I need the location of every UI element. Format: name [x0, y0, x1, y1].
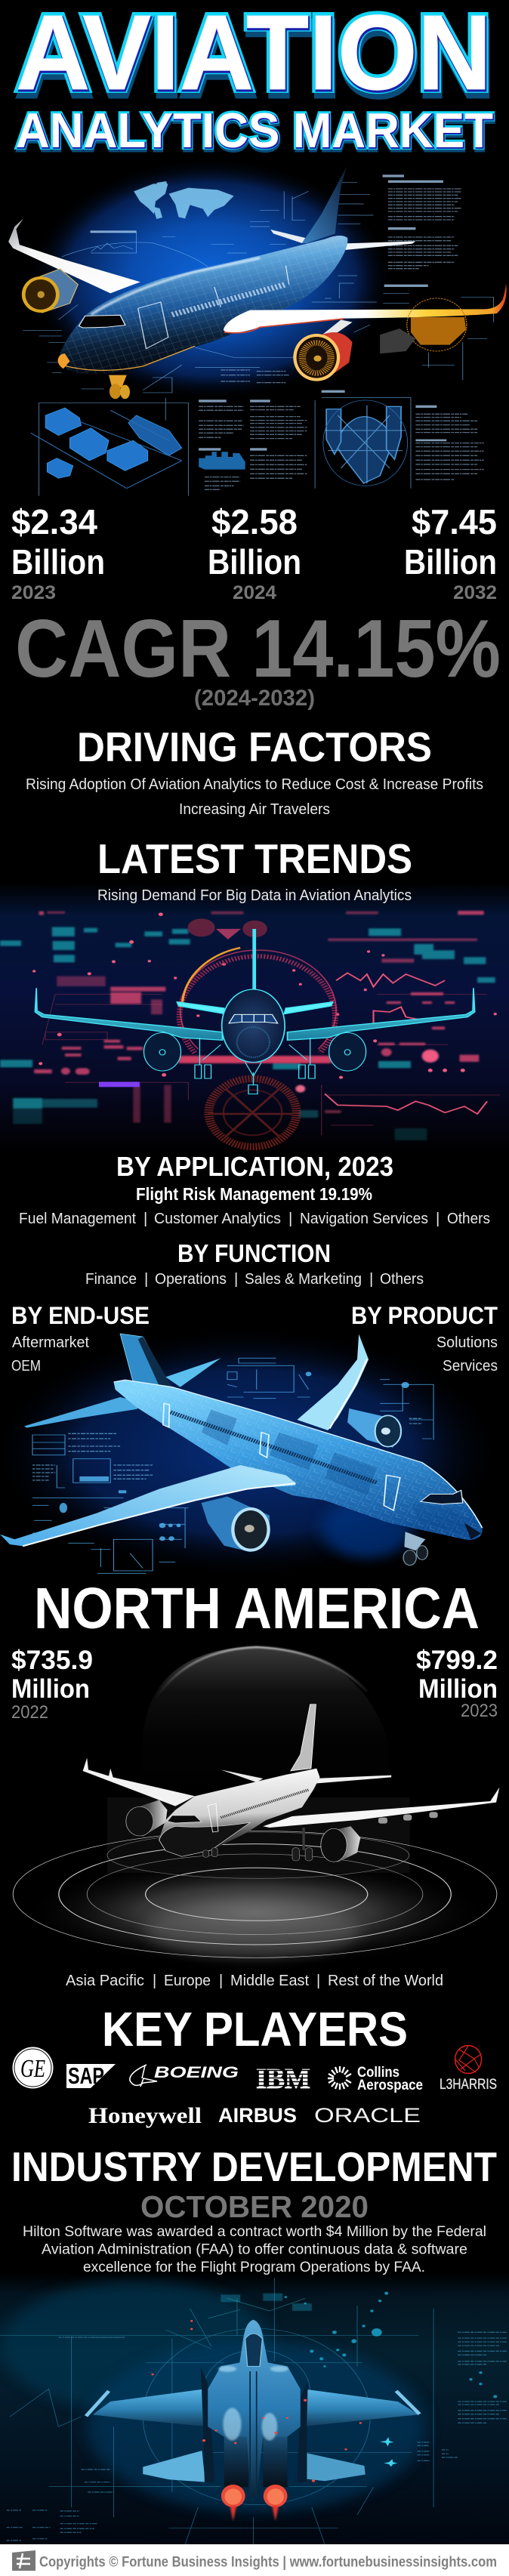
latest trends text: Rising Demand For Big Data in Aviation Analytics	[97, 887, 412, 904]
function list: Others	[380, 1270, 424, 1288]
logo: Boeing	[130, 2064, 239, 2087]
far wing	[297, 1334, 369, 1430]
near wing	[0, 1465, 295, 1546]
far wing	[83, 1758, 195, 1806]
development date: OCTOBER 2020	[140, 2189, 369, 2224]
red markers	[151, 2320, 362, 2482]
north america 2022: Million	[11, 1674, 90, 1704]
machinery bottom left	[45, 408, 182, 478]
application list: Fuel Management	[19, 1210, 136, 1227]
jet illustration	[0, 2273, 509, 2544]
function list: |	[234, 1270, 238, 1288]
driving factors text: Rising Adoption Of Aviation Analytics to Reduce Cost & Increase Profits	[26, 776, 483, 793]
development text: excellence for the Flight Program Operations by FAA.	[83, 2259, 425, 2275]
heading: by application: BY APPLICATION, 2023	[116, 1151, 393, 1182]
regions list: Europe	[164, 1973, 211, 1989]
by end-use: OEM	[11, 1357, 41, 1374]
tail planes	[270, 230, 305, 243]
title line: ANALYTICS MARKET: ANALYTICS MARKET	[16, 103, 493, 158]
regions list: Asia Pacific	[66, 1973, 144, 1989]
market size 2023	[11, 502, 105, 603]
regions list: Rest of the World	[328, 1973, 443, 1989]
logo: L3Harris: L3HARRIS	[440, 2077, 497, 2093]
mesh structure bottom right	[326, 406, 401, 483]
application list: Others	[447, 1210, 490, 1227]
market size 2032: $7.45	[412, 502, 497, 541]
logo: SAP: SAP	[68, 2062, 104, 2089]
data text	[7, 2332, 507, 2541]
plane front view	[35, 929, 475, 1094]
skyline graphic	[199, 452, 245, 470]
engine tubes	[224, 2422, 288, 2487]
small aircraft icons	[380, 2437, 397, 2466]
regions list	[66, 1973, 443, 1989]
heading: latest trends: LATEST TRENDS	[97, 835, 412, 882]
near wing	[224, 283, 507, 333]
fuselage highlight	[91, 258, 260, 315]
application list: |	[436, 1210, 440, 1227]
logo: GE: GE	[20, 2055, 45, 2083]
title	[16, 0, 494, 161]
window band	[172, 285, 285, 315]
market size 2032: 2032	[453, 582, 497, 603]
landing gear	[109, 375, 130, 399]
function list: Finance	[85, 1270, 137, 1288]
door frames	[138, 266, 289, 349]
application list: Navigation Services	[300, 1210, 428, 1227]
white airplane on rings	[13, 1646, 499, 1967]
far engine	[126, 1800, 167, 1837]
driving factors text	[26, 776, 483, 818]
glints	[218, 2366, 288, 2441]
market size 2024: $2.58	[211, 502, 298, 541]
north america 2023: Million	[418, 1674, 498, 1704]
logo: Collins Aerospace	[328, 2065, 423, 2093]
far engine	[22, 269, 78, 313]
north america 2022: $735.9	[11, 1646, 93, 1675]
cockpit windows	[79, 315, 125, 328]
CAGR period: (2024-2032)	[194, 686, 315, 711]
development text	[23, 2223, 486, 2275]
function list: Operations	[155, 1270, 227, 1288]
development text: Hilton Software was awarded a contract worth $4 Million by the Federal	[23, 2223, 486, 2240]
application list	[19, 1210, 490, 1227]
function list	[85, 1270, 424, 1288]
by end-use: Aftermarket	[12, 1334, 89, 1351]
market size 2024	[208, 502, 301, 603]
purple highlight	[99, 1082, 140, 1087]
scatter dots	[32, 912, 497, 1079]
regions list: Middle East	[230, 1973, 309, 1989]
development text: Aviation Administration (FAA) to offer continuous data & software	[42, 2241, 467, 2258]
logo: Airbus: AIRBUS	[218, 2104, 297, 2127]
north america 2023: $799.2	[416, 1646, 498, 1675]
logo: L3Harris	[440, 2045, 497, 2093]
by end-use: BY END-USE	[11, 1302, 150, 1329]
fuselage	[159, 1769, 320, 1856]
title line: ANALYTICS MARKET: ANALYTICS MARKET	[17, 106, 494, 161]
logo: GE	[12, 2047, 53, 2089]
logo: Collins Aerospace: Collins	[357, 2065, 399, 2081]
floor glow	[21, 1859, 489, 1967]
market size 2032: Billion	[404, 542, 497, 582]
world map	[134, 181, 234, 219]
logo: Collins Aerospace: Aerospace	[357, 2078, 423, 2093]
logo: IBM: IBM	[256, 2063, 310, 2095]
wing launcher rails	[86, 2391, 420, 2416]
market size 2023: $2.34	[11, 502, 97, 541]
map dots	[221, 2292, 497, 2398]
regions list: |	[316, 1973, 320, 1989]
HUD arc	[180, 956, 335, 1053]
tail planes	[165, 1358, 221, 1387]
function list: |	[144, 1270, 148, 1288]
far wing	[8, 218, 140, 293]
landing gear	[403, 1532, 427, 1566]
tail planes	[143, 2451, 205, 2482]
right side of plane	[284, 988, 475, 1078]
dark fuselage panels	[202, 1410, 471, 1533]
near engine	[293, 319, 353, 381]
by end-use	[11, 1302, 150, 1374]
north america 2022: 2022	[11, 1702, 48, 1723]
application list: |	[143, 1210, 147, 1227]
heading: driving factors: DRIVING FACTORS	[77, 723, 432, 770]
leading application: Flight Risk Management 19.19%	[136, 1184, 372, 1204]
blueprint details	[32, 1358, 433, 1573]
exhaust nozzles	[221, 2485, 288, 2521]
signal polylines	[325, 973, 487, 1114]
regions list: |	[153, 1973, 156, 1989]
wings	[93, 2389, 208, 2426]
title line: ANALYTICS MARKET: ANALYTICS MARKET	[16, 103, 493, 158]
footer logo	[12, 2550, 35, 2571]
tail	[291, 1704, 316, 1771]
driving factors text: Increasing Air Travelers	[179, 801, 330, 818]
rings	[13, 1831, 497, 1957]
far engine	[347, 1408, 402, 1448]
market size 2024: Billion	[208, 542, 301, 582]
by product	[351, 1302, 498, 1374]
glass dome	[143, 1646, 390, 1797]
pink data blocks	[34, 911, 484, 1123]
application list: |	[288, 1210, 292, 1227]
footer	[0, 2544, 509, 2576]
HUD wheel	[208, 1078, 297, 1146]
near wing	[263, 1788, 499, 1828]
application list: Customer Analytics	[154, 1210, 281, 1227]
market size 2032	[404, 502, 497, 603]
market size 2024: 2024	[233, 582, 276, 603]
function list: |	[369, 1270, 373, 1288]
by product: Services	[443, 1357, 498, 1374]
teal data bars	[0, 927, 495, 1140]
hero illustration: airplane blueprint	[8, 159, 507, 496]
by product: Solutions	[437, 1334, 498, 1351]
tail fin	[120, 1334, 171, 1387]
logo: Boeing: BOEING	[154, 2064, 239, 2081]
regions list: |	[219, 1973, 223, 1989]
by product: BY PRODUCT	[351, 1302, 498, 1329]
spec text blocks	[199, 189, 484, 489]
blue blueprint airplane	[0, 1327, 504, 1578]
window band	[171, 1412, 377, 1482]
orange structure	[380, 298, 467, 353]
nose	[58, 353, 69, 369]
dim pink grid	[42, 995, 500, 1135]
tail fin	[302, 166, 347, 243]
bright hot spots	[422, 1050, 439, 1063]
radar lines	[0, 2278, 433, 2544]
fuselage	[208, 2320, 301, 2497]
fuselage	[113, 1380, 483, 1540]
market size 2023: Billion	[11, 542, 105, 582]
title line: ANALYTICS MARKET: ANALYTICS MARKET	[17, 103, 494, 159]
logo: Oracle: ORACLE	[314, 2104, 421, 2127]
landing gear	[203, 1828, 313, 1861]
cockpit	[421, 1490, 463, 1504]
trends illustration: front-view airplane	[0, 884, 509, 1154]
top gauges	[188, 918, 267, 939]
logo: Honeywell: Honeywell	[88, 2103, 202, 2128]
north america 2022	[11, 1646, 93, 1723]
heading: by function: BY FUNCTION	[177, 1239, 331, 1267]
north america 2023: 2023	[461, 1701, 498, 1721]
door frames	[163, 1403, 400, 1510]
title line: AVIATION: AVIATION	[17, 0, 493, 118]
market size 2023: 2023	[11, 582, 56, 603]
left side of plane	[35, 988, 226, 1078]
fuselage	[58, 236, 347, 374]
thin data lines around plane	[23, 183, 494, 496]
heading: key players: KEY PLAYERS	[102, 2002, 408, 2056]
near engine	[321, 1826, 360, 1862]
north america 2023	[416, 1646, 498, 1721]
fins	[201, 2366, 215, 2482]
near engine	[202, 1497, 270, 1552]
function list: Sales & Marketing	[245, 1270, 362, 1288]
